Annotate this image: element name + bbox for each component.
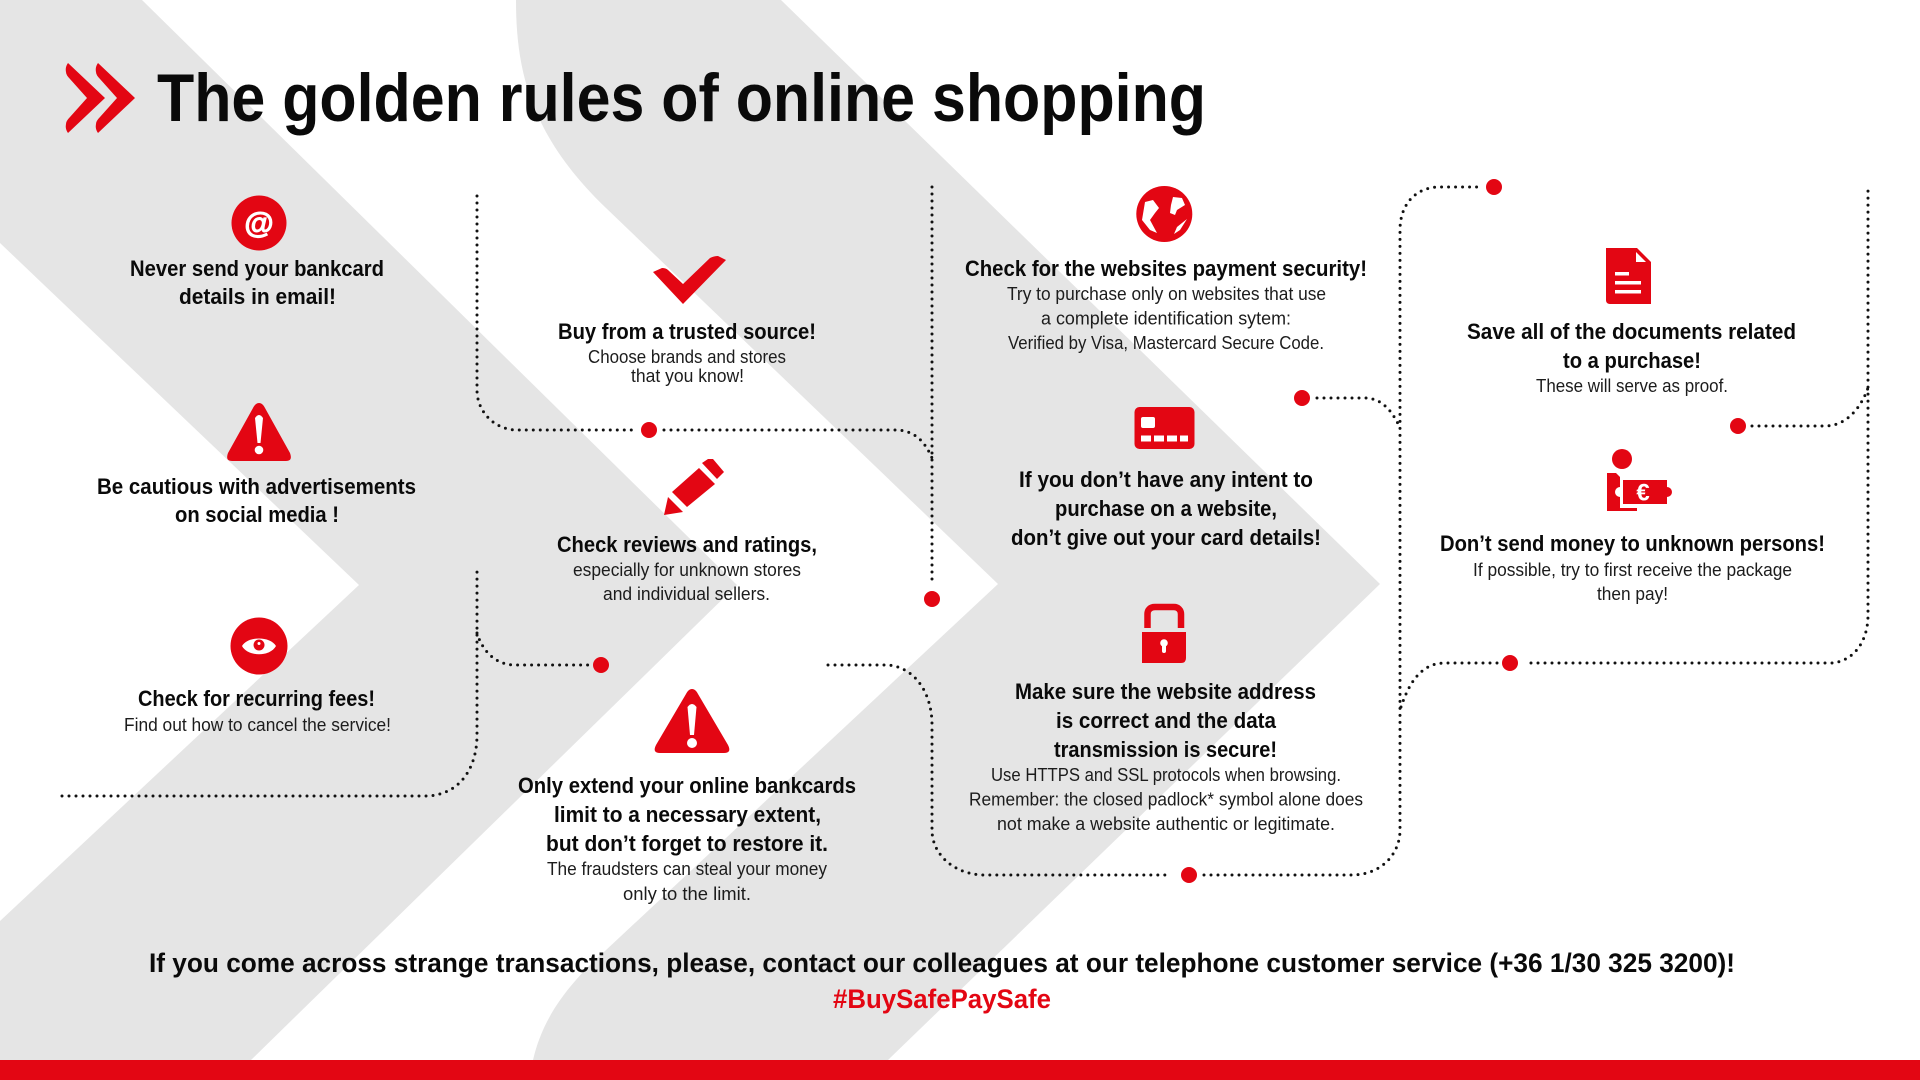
text: payment security: Check for the websites payment security!: [965, 256, 1367, 281]
text: save documents: to a purchase!: [1563, 348, 1701, 373]
icon: padlock: [1142, 607, 1186, 663]
icon: person with euro note: €: [1636, 480, 1650, 506]
text: unknown persons: then pay!: [1597, 584, 1668, 604]
heading: card details: [1011, 467, 1321, 550]
text: website address: Use HTTPS and SSL protocols when browsing.: [991, 765, 1341, 785]
heading: bankcard details: details in email!: [179, 284, 336, 309]
rule: card details: [1011, 407, 1321, 550]
icon: person with euro note: [1607, 449, 1672, 511]
text: payment security: a complete identification sytem:: [1041, 308, 1291, 328]
text: save documents: [1467, 319, 1796, 396]
dotted connector lines: [62, 186, 1868, 875]
text: bankcard limit: but don’t forget to restore it.: [546, 831, 828, 856]
heading: bankcard details: Never send your bankcard: [130, 256, 384, 281]
text: reviews and ratings: Check reviews and ratings,: [557, 532, 817, 557]
icon: at sign: @: [244, 207, 274, 240]
rule: trusted source: [558, 256, 816, 386]
text: reviews and ratings: especially for unknown stores: [573, 560, 801, 580]
icon: check mark: [653, 256, 726, 304]
text: website address: [969, 679, 1363, 834]
icon: document: [1606, 248, 1651, 304]
rule: payment security: [965, 186, 1367, 353]
text: bankcard limit: [518, 773, 856, 904]
text: unknown persons: Don’t send money to unknown persons!: [1440, 531, 1825, 556]
icon: warning triangle: [227, 403, 291, 461]
text: unknown persons: If possible, try to first receive the package: [1473, 560, 1792, 580]
bottom red bar: [0, 1060, 1920, 1080]
rule: cautious with advertisements: [97, 403, 416, 527]
rule: save documents: [1467, 248, 1796, 396]
rule: website address: [969, 607, 1363, 834]
text: payment security: Try to purchase only on websites that use: [1007, 284, 1326, 304]
text: website address: is correct and the data: [1056, 708, 1277, 733]
icon: at sign: [232, 196, 286, 250]
text: save documents: These will serve as proof.: [1536, 376, 1728, 396]
icon: pencil: [664, 459, 724, 515]
text: website address: Make sure the website address: [1015, 679, 1316, 704]
heading: card details: If you don’t have any intent to: [1019, 467, 1313, 492]
background chevrons: [0, 0, 1380, 1060]
rule: unknown persons: [1440, 449, 1825, 604]
text: bankcard limit: only to the limit.: [623, 884, 751, 904]
text: website address: not make a website authentic or legitimate.: [997, 814, 1335, 834]
text: bankcard limit: limit to a necessary extent,: [554, 802, 821, 827]
connector dots: [593, 179, 1746, 883]
text: trusted source: that you know!: [631, 366, 744, 386]
heading: advertisements: Be cautious with advertisements: [97, 474, 416, 499]
title: The golden rules of online shopping: [157, 60, 1206, 136]
hashtag: #BuySafePaySafe: [833, 984, 1051, 1014]
heading: card details: don’t give out your card details!: [1011, 525, 1321, 550]
rule: never send bankcard details: [130, 196, 384, 309]
text: payment security: [965, 256, 1367, 353]
text: save documents: Save all of the documents related: [1467, 319, 1796, 344]
heading: bankcard details: [130, 256, 384, 309]
icon: bank card: [1134, 407, 1194, 449]
rule: recurring fees: [124, 618, 391, 735]
text: bankcard limit: The fraudsters can steal your money: [547, 859, 827, 879]
heading: advertisements: on social media !: [175, 502, 339, 527]
rule: reviews and ratings: [557, 459, 817, 604]
heading: card details: purchase on a website,: [1055, 496, 1277, 521]
text: trusted source: Buy from a trusted source!: [558, 319, 816, 344]
title icon: double chevron: [66, 63, 135, 133]
text: recurring fees: Check for recurring fees!: [138, 686, 375, 711]
text: payment security: Verified by Visa, Mastercard Secure Code.: [1008, 333, 1324, 353]
text: trusted source: [558, 319, 816, 386]
icon: eye: [230, 618, 288, 674]
footer contact message: If you come across strange transactions, please, contact our colleagues at our telephone customer service (+36 1/30 325 3200)!: [149, 948, 1735, 978]
text: reviews and ratings: and individual sellers.: [603, 584, 770, 604]
text: unknown persons: [1440, 531, 1825, 604]
text: bankcard limit: Only extend your online bankcards: [518, 773, 856, 798]
icon: globe: [1136, 186, 1192, 242]
heading: advertisements: [97, 474, 416, 527]
text: reviews and ratings: [557, 532, 817, 604]
text: recurring fees: [124, 686, 391, 735]
icon: warning triangle large: [655, 689, 729, 753]
text: recurring fees: Find out how to cancel the service!: [124, 715, 391, 735]
text: trusted source: Choose brands and stores: [588, 347, 786, 367]
text: website address: transmission is secure!: [1054, 737, 1277, 762]
rule: bankcard limit: [518, 689, 856, 904]
text: website address: Remember: the closed padlock* symbol alone does: [969, 790, 1363, 810]
